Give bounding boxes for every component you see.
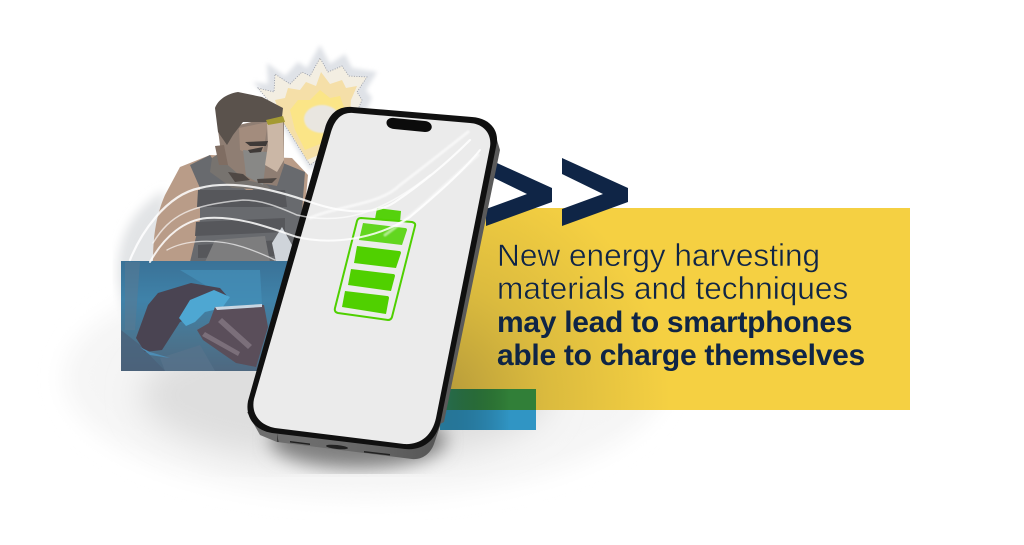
colour bars <box>440 389 536 430</box>
text block: may lead to smartphones <box>497 306 852 339</box>
neck and shoulder <box>210 150 272 190</box>
man <box>153 92 308 262</box>
wrist band <box>140 347 170 358</box>
chevrons <box>486 158 628 226</box>
text block: materials and techniques <box>497 270 848 306</box>
ear <box>215 145 228 165</box>
fingers <box>179 290 230 326</box>
right hand <box>197 305 268 367</box>
phone body <box>247 400 442 459</box>
body aura <box>118 190 165 320</box>
head <box>218 118 284 186</box>
headband highlight <box>266 116 285 125</box>
left hand <box>136 283 228 352</box>
wind lines <box>130 132 480 262</box>
tank top <box>190 155 305 262</box>
eyes <box>245 141 268 153</box>
notch <box>386 118 432 132</box>
phone <box>247 107 500 459</box>
phone bezel <box>247 107 497 449</box>
ports <box>277 433 390 456</box>
floor shadow <box>65 260 665 496</box>
hair <box>215 92 283 145</box>
phone screen <box>253 113 490 444</box>
icon: battery <box>335 208 415 320</box>
yellow panel <box>440 208 910 410</box>
text block: able to charge themselves <box>497 339 865 372</box>
vest edge highlight <box>272 227 292 262</box>
phone right edge <box>438 140 500 425</box>
icon: sun <box>253 45 377 170</box>
photo: hands holding phone <box>121 261 291 371</box>
beard <box>228 172 277 183</box>
text block: New energy harvesting <box>497 237 820 273</box>
torso <box>153 155 308 262</box>
